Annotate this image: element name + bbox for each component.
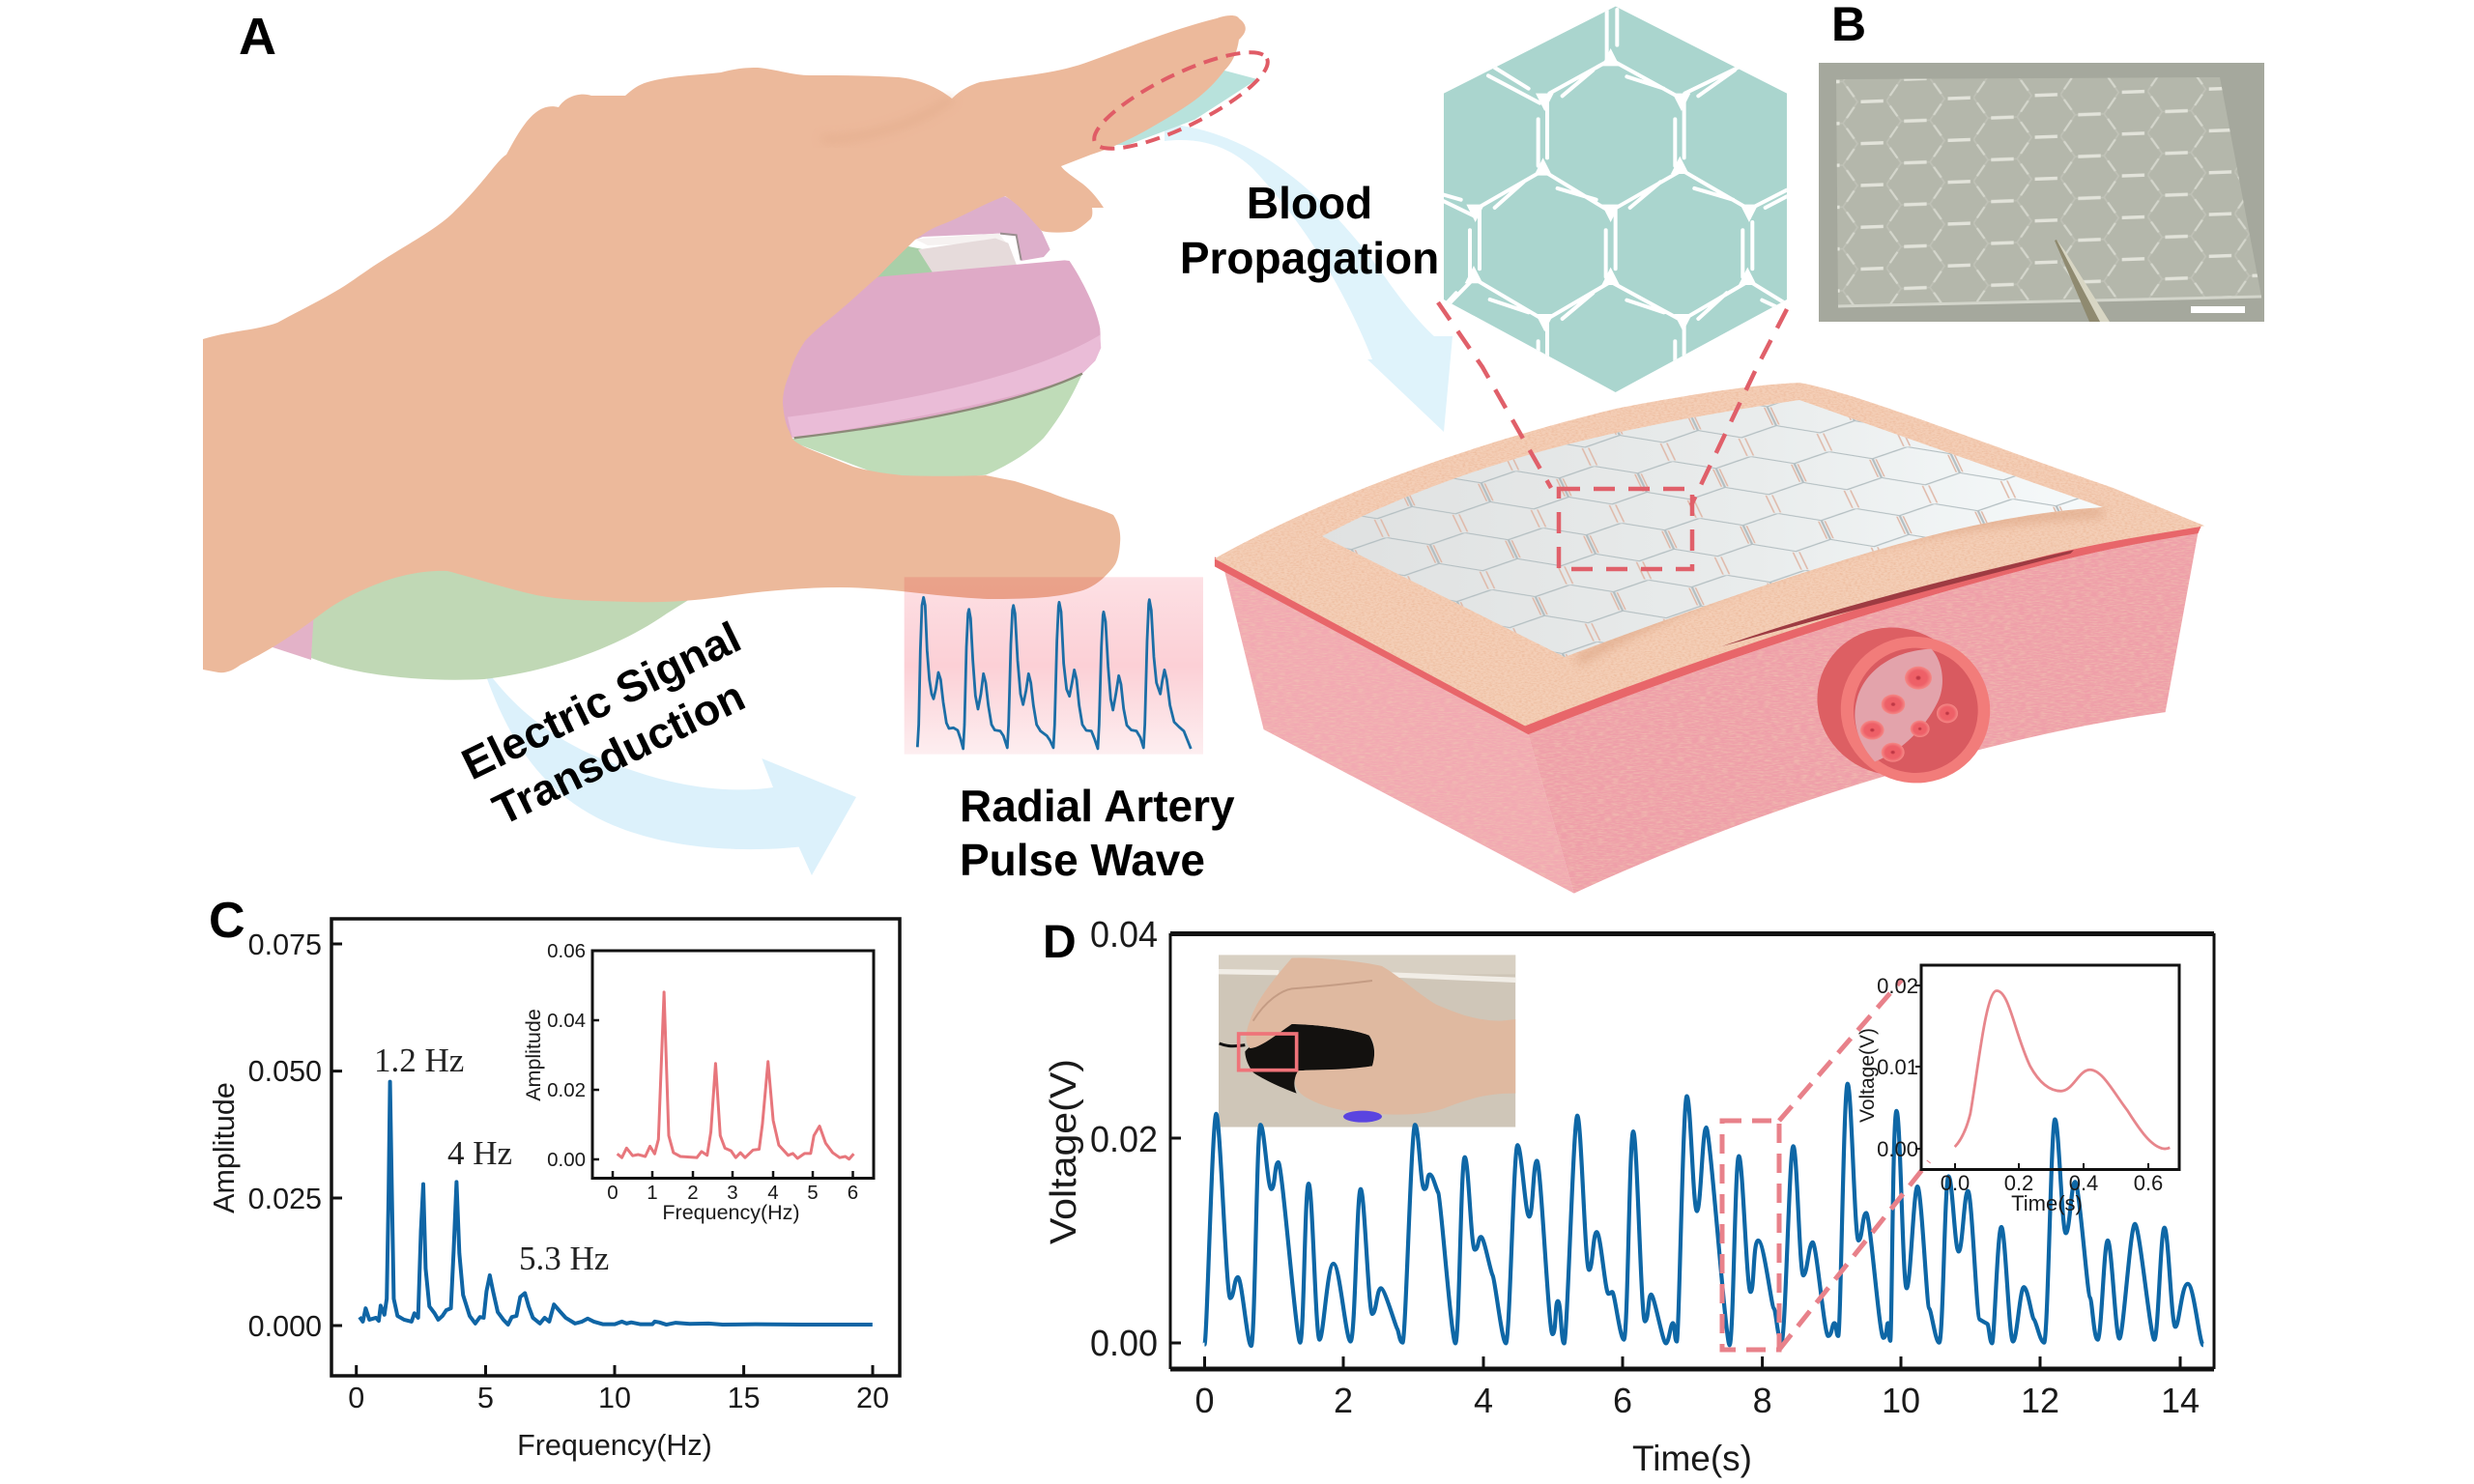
- chart D: voltage trace: 12: [2021, 1381, 2059, 1420]
- chart C inset: 6: [848, 1182, 858, 1204]
- peak labels: [374, 1042, 609, 1277]
- heading: radial artery pulse wave: Pulse Wave: [960, 835, 1205, 885]
- chart D: voltage trace: 6: [1613, 1381, 1632, 1420]
- red dermis lip: [1215, 526, 2201, 734]
- heading: electric signal transduction: Transduction: [485, 671, 752, 835]
- chart C inset: 3: [727, 1182, 738, 1204]
- chart C: amplitude spectrum: 0: [348, 1382, 364, 1414]
- chart D: voltage trace: Time(s): [1632, 1439, 1752, 1478]
- right tissue face: [1528, 532, 2198, 894]
- chart C: amplitude spectrum: Amplitude: [208, 1082, 241, 1213]
- photo of sensor film: [1819, 63, 2264, 322]
- chart C: amplitude spectrum: 10: [598, 1382, 631, 1414]
- chart C inset: 2: [687, 1182, 699, 1204]
- chart D inset: 0.6: [2134, 1171, 2163, 1195]
- dashed zoom guide lines and box: [1438, 302, 1787, 569]
- chart D: voltage trace: 0.04: [1090, 915, 1158, 956]
- heading: radial artery pulse wave: Radial Artery: [960, 781, 1235, 831]
- chart D: voltage trace: 10: [1882, 1381, 1920, 1420]
- chart C: amplitude spectrum: 0.050: [248, 1055, 322, 1088]
- chart D inset: 0.2: [2004, 1171, 2033, 1195]
- chart D: voltage trace: 0: [1194, 1381, 1215, 1420]
- chart C inset: 0: [607, 1182, 618, 1204]
- chart C: amplitude spectrum: [208, 919, 900, 1462]
- chart D: voltage trace: 4: [1474, 1381, 1493, 1420]
- mouse upper part: [763, 190, 1101, 483]
- dashed ellipse around fingertip sensor: [1083, 35, 1279, 166]
- skin block: [1215, 383, 2204, 894]
- chart C: amplitude spectrum: 5: [477, 1382, 494, 1414]
- chart D: voltage trace: Voltage(V): [1044, 1059, 1084, 1244]
- chart C inset: 0.00: [547, 1149, 586, 1171]
- chart D: voltage trace: 8: [1753, 1381, 1772, 1420]
- shadow under sensor patch: [1577, 512, 2103, 661]
- peak labels: 4 Hz: [447, 1134, 512, 1172]
- chart D inset: 0.4: [2069, 1171, 2098, 1195]
- chart C inset: 4: [767, 1182, 779, 1204]
- arrow: blood propagation: [1165, 124, 1453, 432]
- peak labels: 1.2 Hz: [374, 1042, 464, 1079]
- heading: electric signal transduction: Electric Signal: [454, 613, 748, 789]
- chart C inset: Frequency(Hz): [662, 1201, 800, 1224]
- chart C: amplitude spectrum: 0.075: [248, 928, 322, 961]
- chart C inset: [522, 940, 874, 1224]
- arrow: electric signal transduction: [481, 664, 856, 875]
- blue voltage line: [1204, 1084, 2203, 1346]
- heading: blood propagation: Propagation: [1180, 233, 1439, 283]
- chart C inset: 0.06: [547, 940, 586, 962]
- chart D inset: [1856, 965, 2179, 1215]
- chart C inset: 1: [647, 1182, 658, 1204]
- chart D: voltage trace: [1044, 915, 2214, 1478]
- chart D inset: Time(s): [2011, 1191, 2083, 1215]
- chart D inset: 0.02: [1877, 974, 1918, 998]
- chart D inset: Voltage(V): [1856, 1028, 1879, 1123]
- left tissue face: [1224, 571, 1574, 894]
- pulse wave panel: [905, 577, 1203, 755]
- mouse lower part: [270, 618, 314, 660]
- epidermis top: [1215, 383, 2204, 726]
- chart C inset: 5: [807, 1182, 819, 1204]
- dashed selection with zoom lines: [1722, 980, 1929, 1350]
- sensor strip on fingertip: [1102, 71, 1257, 145]
- scale bar: [2191, 306, 2245, 313]
- chart D: voltage trace: 14: [2161, 1381, 2200, 1420]
- heading: blood propagation: Blood: [1247, 178, 1372, 228]
- blood cells: [1860, 667, 1958, 762]
- chart D: voltage trace: 0.00: [1090, 1324, 1158, 1364]
- hand: [203, 15, 1246, 672]
- chart C: amplitude spectrum: 0.025: [248, 1183, 322, 1215]
- chart C: amplitude spectrum: 0.000: [248, 1310, 322, 1343]
- chart C inset: 0.02: [547, 1079, 586, 1101]
- zoom hexagon: [1444, 3, 1787, 392]
- label D: D: [1043, 917, 1077, 968]
- chart D inset: 0.01: [1877, 1055, 1918, 1079]
- chart C: amplitude spectrum: 20: [856, 1382, 889, 1414]
- chart D: voltage trace: 0.02: [1090, 1120, 1158, 1160]
- artery cross-section: [1797, 606, 2006, 800]
- chart D inset: 0.00: [1877, 1137, 1918, 1161]
- peak labels: 5.3 Hz: [519, 1240, 609, 1277]
- chart C: amplitude spectrum: Frequency(Hz): [517, 1429, 712, 1462]
- chart D: voltage trace: 2: [1334, 1381, 1353, 1420]
- chart C inset: Amplitude: [522, 1009, 545, 1101]
- computer mouse: [270, 190, 1101, 680]
- chart D inset: 0.0: [1941, 1171, 1970, 1195]
- sensor patch on skin: [1322, 400, 2103, 657]
- chart C inset: 0.04: [547, 1010, 586, 1032]
- photo of hand on mouse: [1219, 955, 1515, 1127]
- needle: [2055, 240, 2110, 322]
- label C: C: [209, 893, 245, 949]
- chart C: amplitude spectrum: 15: [728, 1382, 761, 1414]
- label A: A: [239, 8, 276, 66]
